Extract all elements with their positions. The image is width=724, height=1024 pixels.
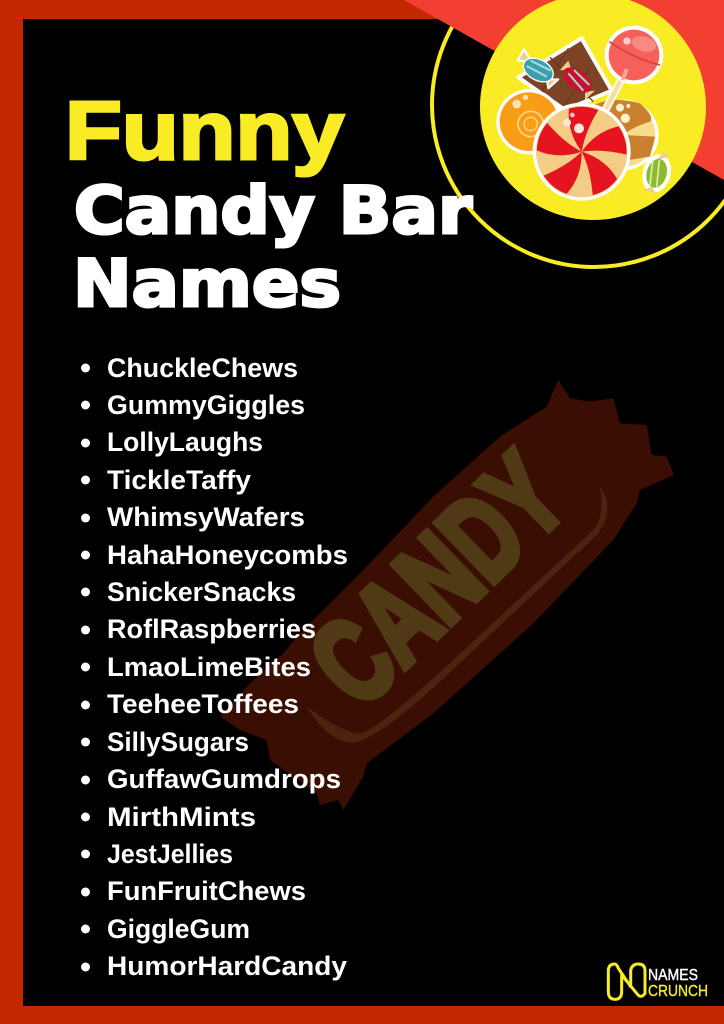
list of candy bar names: RoflRaspberries [107, 614, 316, 644]
candy bar wrapper [220, 380, 674, 810]
icon: lollipop [605, 26, 663, 111]
logo word: NAMES: NAMES [648, 967, 698, 984]
list of candy bar names: SillySugars [107, 727, 249, 757]
yellow ring [432, 0, 724, 267]
list of candy bar names: HahaHoneycombs [107, 540, 348, 570]
bullets [81, 364, 90, 972]
list of candy bar names: LmaoLimeBites [107, 652, 311, 682]
title: Candy Bar: Candy Bar [74, 174, 472, 249]
list of candy bar names: WhimsyWafers [107, 502, 305, 532]
watermark: candy bar illustration [220, 380, 674, 810]
icon: candy collection [496, 26, 675, 201]
icon: N logo mark [608, 964, 645, 999]
logo word: CRUNCH: CRUNCH [648, 983, 708, 1000]
title: Funny: Funny [65, 84, 344, 177]
logo: Names Crunch [608, 964, 708, 1000]
icon: red peppermint swirl [533, 103, 631, 201]
list of candy bar names: SnickerSnacks [107, 577, 296, 607]
list of candy bar names: GuffawGumdrops [107, 764, 341, 794]
list of candy bar names: ChuckleChews [107, 353, 298, 383]
red corner triangle [404, 0, 724, 180]
icon: caramel candy bubbles [616, 104, 630, 123]
yellow circle [480, 0, 706, 220]
icon: teal wrapped candy [517, 49, 558, 88]
list of candy bar names: TeeheeToffees [107, 689, 299, 719]
icon: back caramel candy [588, 100, 659, 170]
list of candy bar names: MirthMints [107, 802, 256, 832]
list of candy bar names [81, 353, 348, 981]
list of candy bar names: GummyGiggles [107, 390, 305, 420]
icon: red wrapped candy [558, 61, 596, 100]
icon: orange swirl candy [496, 89, 562, 154]
list of candy bar names: TickleTaffy [107, 465, 251, 495]
list of candy bar names: HumorHardCandy [107, 951, 347, 981]
icon: chocolate bar [518, 38, 612, 110]
list of candy bar names: FunFruitChews [107, 876, 306, 906]
list of candy bar names: LollyLaughs [107, 427, 263, 457]
list of candy bar names: JestJellies [107, 839, 233, 869]
candy bar label: CANDY [285, 429, 590, 730]
icon: green wrapped candy [638, 151, 675, 196]
title: Names: Names [73, 247, 341, 322]
list of candy bar names: GiggleGum [107, 914, 250, 944]
candy bar swoosh [307, 487, 608, 743]
